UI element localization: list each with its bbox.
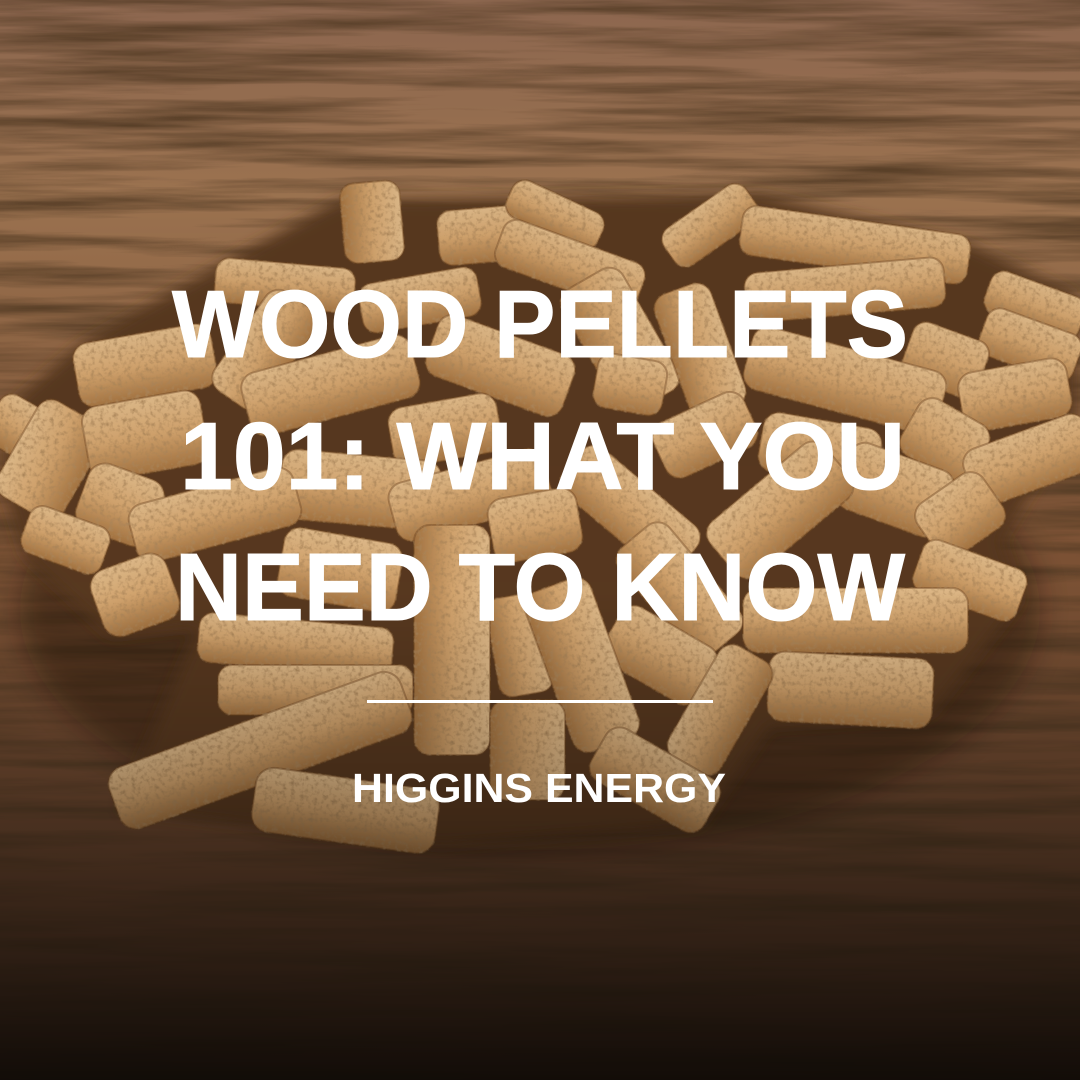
divider line [367, 700, 713, 703]
title: WOOD PELLETS [172, 271, 908, 378]
title: 101: WHAT YOU [180, 403, 905, 510]
title: NEED TO KNOW [175, 534, 905, 641]
pile of wood pellets [0, 176, 1080, 856]
brand name: HIGGINS ENERGY [352, 765, 726, 811]
title [172, 271, 908, 641]
pile shadow and underlay [5, 195, 1075, 850]
